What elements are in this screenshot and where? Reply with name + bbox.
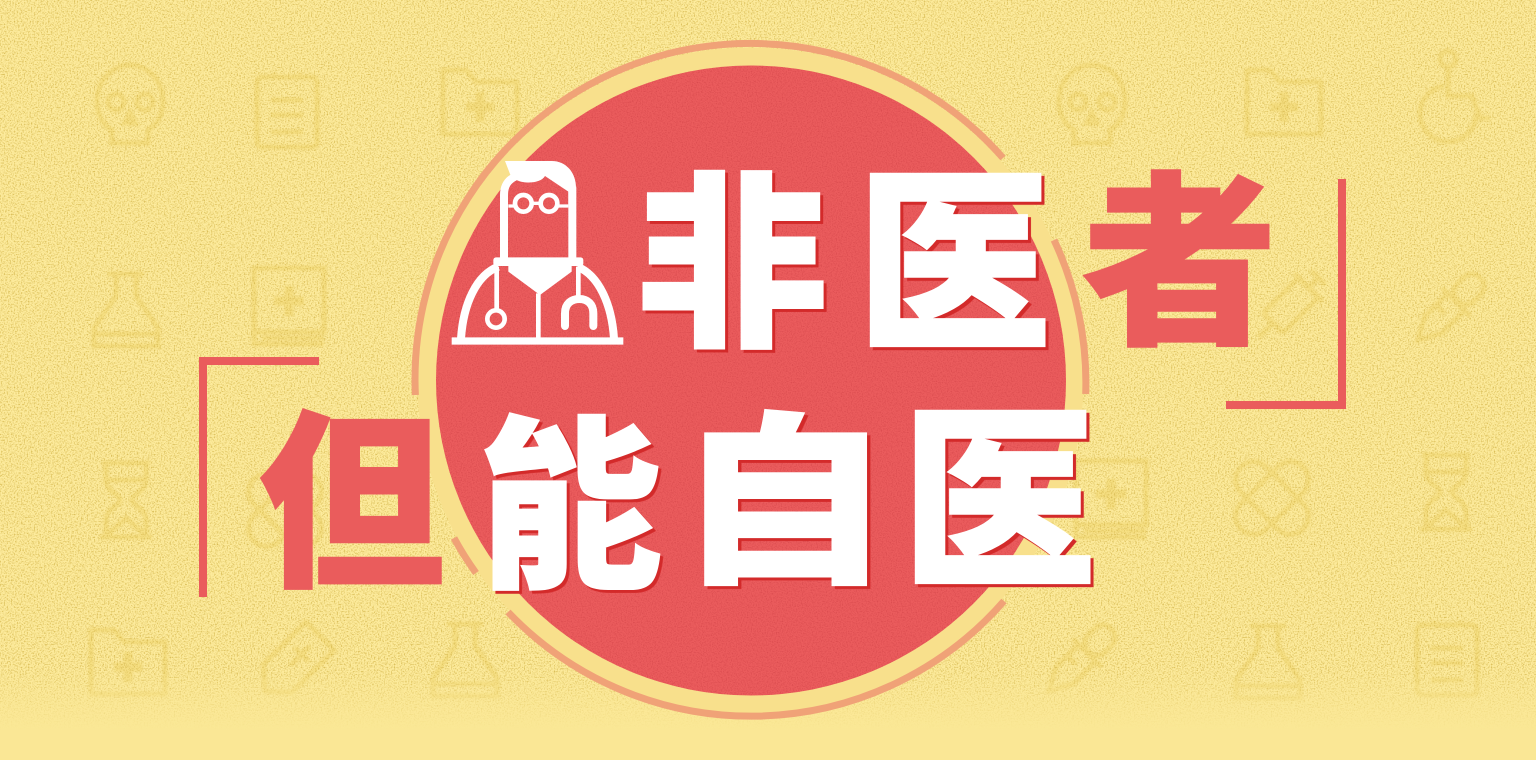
icon: bandage [1228,454,1316,542]
icon: syringe [1245,264,1332,351]
icon: price tag [251,622,334,705]
character: 但: 但 [259,399,445,611]
icon: medical book right [1076,461,1146,537]
icon: doctor with stethoscope [452,161,623,345]
character: 者: 者 [1082,162,1278,369]
icon: flask lower [433,624,497,696]
icon: folder [443,70,517,134]
character: 医: 医 [902,394,1096,612]
outer ring arcs [415,43,1086,716]
icon: flask [94,274,158,346]
bottom fade [0,670,1536,730]
icon: clipboard [257,74,317,147]
icon: dropper lower [1035,615,1125,705]
character: 医: 医 [857,157,1051,375]
icon: medical book [254,268,324,344]
icon: hourglass right [1420,455,1472,529]
icon: skull [97,65,163,143]
icon: clipboard lower [1417,622,1477,695]
icon: bandage left [241,466,329,554]
icon: folder right [1247,70,1321,134]
title line 2 [259,394,1096,613]
red circle [436,66,1066,696]
character: 能: 能 [478,406,662,613]
top-left bracket [199,357,319,597]
background icon pattern [91,51,1494,705]
pale disc behind circle [418,48,1084,714]
character: 非: 非 [636,162,828,372]
bottom-right bracket [1226,179,1346,409]
icon: folder lower [91,630,165,694]
icon: hourglass [100,463,152,537]
title line 1 [636,157,1278,375]
icon: skull right [1059,65,1125,143]
icon: wheelchair [1420,51,1490,142]
character: 自: 自 [677,402,892,608]
red circle grain [430,60,1070,700]
icon: dropper [1404,264,1494,354]
icon: flask lower right [1236,626,1300,698]
